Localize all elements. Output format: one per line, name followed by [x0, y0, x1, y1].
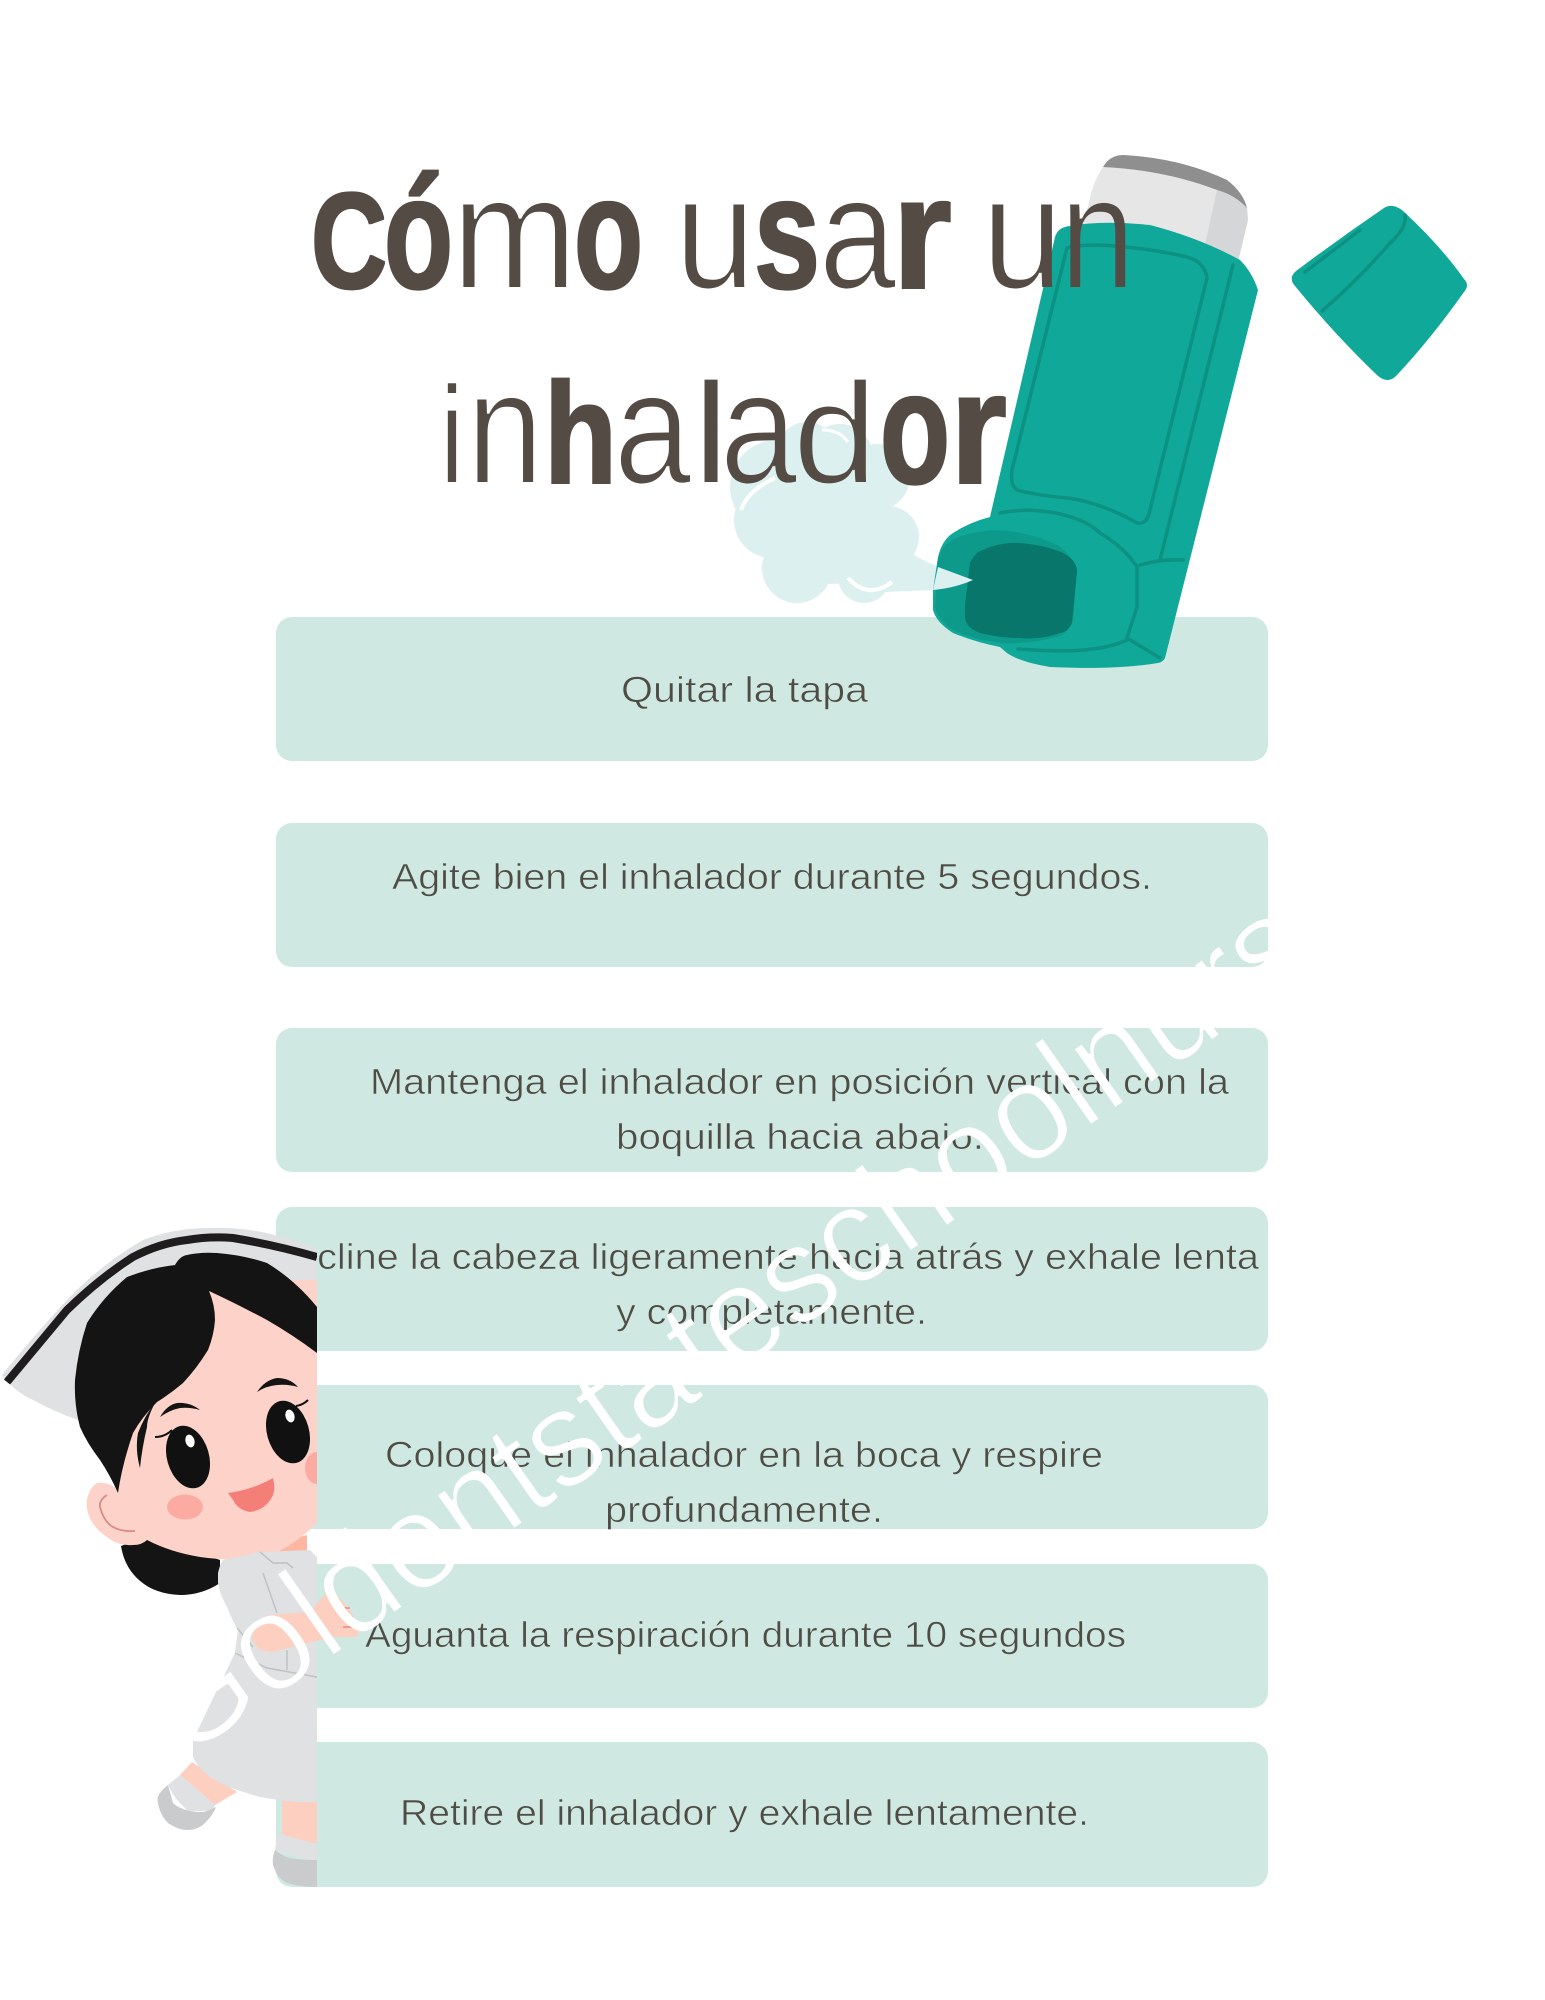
title: bold letters: r	[950, 338, 1007, 517]
title: thin letters: a	[819, 143, 896, 322]
title	[311, 143, 1135, 517]
text: step instructions	[284, 669, 1260, 1833]
title: thin letters: u	[982, 143, 1063, 322]
watermark: Goldentstateschoolnurse	[111, 823, 1395, 1787]
hat	[2, 1228, 317, 1420]
title: thin letters: n	[1060, 143, 1135, 322]
title: thin letters: a	[614, 338, 691, 517]
mouth	[228, 1478, 274, 1512]
title: bold letters: h	[544, 353, 617, 514]
title: bold letters: s	[754, 143, 820, 322]
title: bold letters: C	[311, 165, 387, 318]
text: step instructions: profundamente.	[605, 1489, 883, 1530]
face and ear	[87, 1280, 317, 1560]
title: bold letters: o	[880, 338, 950, 517]
text: step instructions: Incline la cabeza ligeramente hacia atrás y exhale lenta	[284, 1236, 1260, 1277]
skirt	[193, 1653, 317, 1802]
eyes	[166, 1426, 210, 1488]
text: step instructions: Aguanta la respiración durante 10 segundos	[365, 1614, 1126, 1655]
title: bold letters	[311, 143, 1007, 517]
text: step instructions: Quitar la tapa	[621, 669, 869, 710]
icon: nurse character	[2, 1228, 360, 1887]
legs and shoes	[180, 1762, 237, 1805]
title: thin letters: a	[720, 338, 797, 517]
cheeks	[167, 1494, 203, 1520]
icon: spray cloud	[730, 422, 973, 603]
title: bold letters: ó	[384, 143, 453, 322]
icon: inhaler cap	[1292, 206, 1467, 380]
brows	[160, 1403, 200, 1417]
title: thin letters: u	[675, 143, 755, 322]
panel: step cards	[276, 617, 1268, 1887]
text: step instructions: Mantenga el inhalador en posición vertical con la	[370, 1061, 1230, 1102]
title: thin letters: i	[439, 358, 465, 513]
title: thin letters: l	[692, 353, 730, 514]
text: step instructions: Agite bien el inhalador durante 5 segundos.	[392, 856, 1152, 897]
arm and hand	[252, 1592, 360, 1652]
title: bold letters: o	[574, 143, 643, 322]
title: thin letters: m	[452, 143, 577, 322]
title: bold letters: r	[892, 143, 952, 322]
icon: inhaler	[933, 155, 1258, 668]
text: step instructions: Coloque el inhalador en la boca y respire	[385, 1434, 1103, 1475]
hair	[75, 1253, 317, 1493]
neck	[279, 1535, 307, 1552]
bun	[121, 1535, 220, 1595]
text: step instructions: boquilla hacia abajo.	[616, 1116, 984, 1157]
title: thin letters: d	[793, 353, 877, 514]
text: step instructions: Retire el inhalador y exhale lentamente.	[400, 1792, 1089, 1833]
text: step instructions: y completamente.	[616, 1291, 927, 1332]
shirt	[218, 1550, 317, 1677]
title: thin letters	[439, 143, 1135, 517]
title: thin letters: n	[467, 338, 543, 517]
